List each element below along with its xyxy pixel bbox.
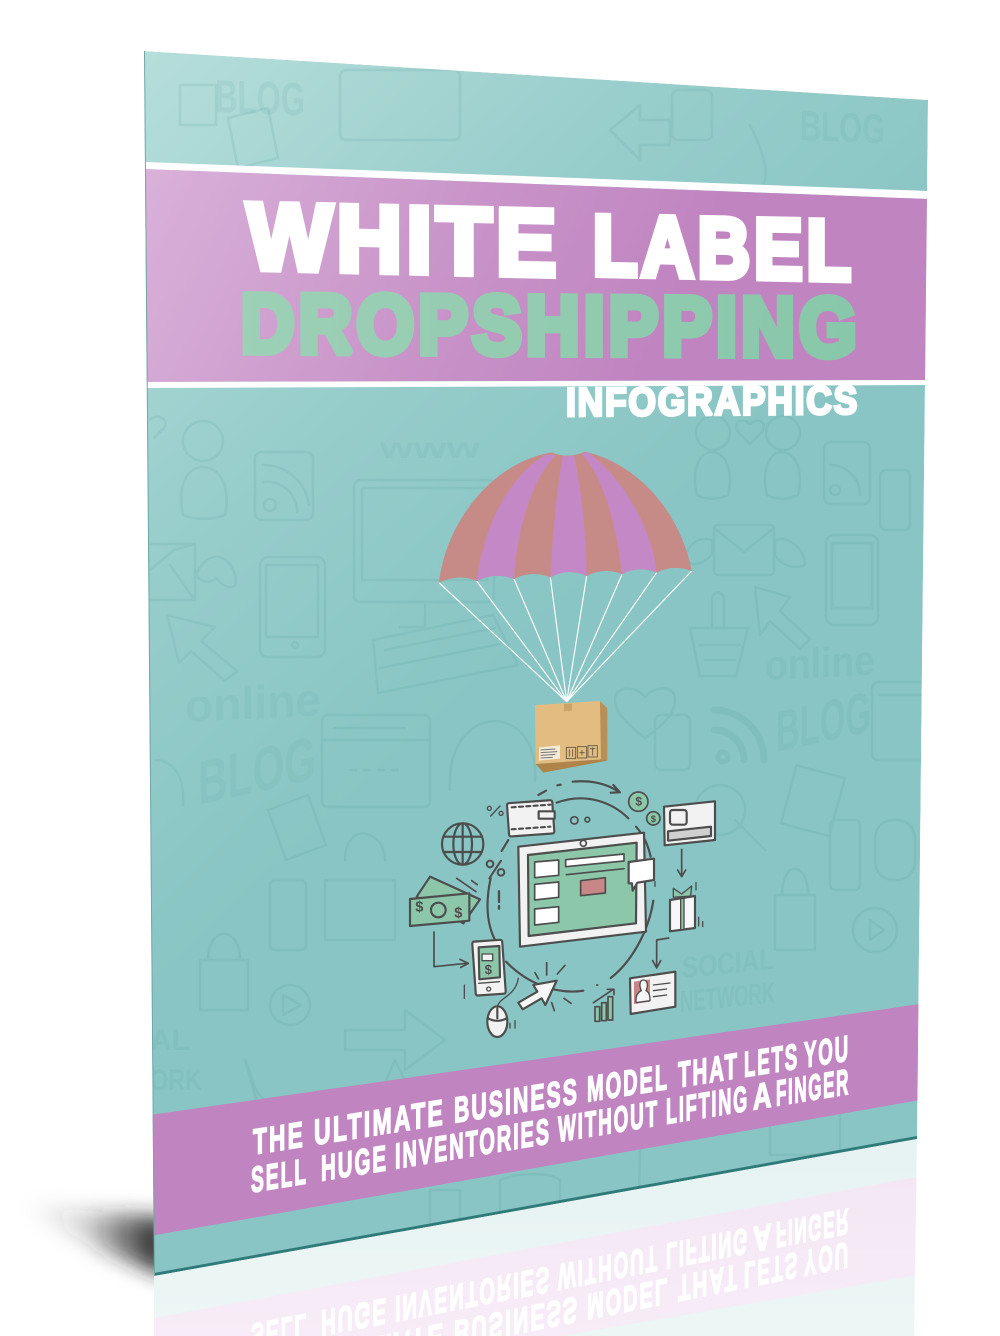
icon: tablet — [518, 833, 654, 947]
dollar signs: $ — [454, 905, 462, 921]
faint doodle words: AL — [150, 1024, 190, 1057]
faint doodle words: NETWORK — [680, 977, 775, 1019]
dollar signs: $ — [635, 795, 642, 809]
faint doodle words: online — [185, 673, 321, 732]
tagline text: MODEL — [587, 1056, 669, 1110]
icon: exclamation mark — [495, 891, 502, 909]
tagline text: INVENTORIES — [395, 1110, 551, 1177]
heading: DROPSHIPPING: DROPSHIPPING — [241, 277, 861, 374]
heading: WHITE LABEL: LABEL — [593, 199, 855, 299]
reflection of the cover: MODEL — [587, 1270, 669, 1327]
parachute cords — [439, 571, 692, 702]
text: FINGER — [776, 1061, 850, 1114]
page thin left edge — [144, 51, 155, 1276]
arrow: gift to id card — [653, 938, 669, 968]
page background — [144, 51, 928, 1276]
dollar signs: $ — [415, 899, 423, 915]
icon: credit card — [664, 801, 715, 845]
icon: globe — [442, 823, 483, 865]
faint doodle words: BLOG — [776, 681, 871, 765]
decorative circles — [571, 817, 590, 824]
icon: cursor arrow — [518, 963, 571, 1011]
icon: bar chart with arrow — [593, 985, 614, 1021]
parachute purple gores — [477, 452, 657, 581]
tagline text: ULTIMATE — [314, 1091, 445, 1153]
faint doodle words: ORK — [150, 1064, 202, 1097]
tagline text: A — [753, 1073, 774, 1118]
page bottom edge — [154, 1136, 917, 1276]
faint doodle words: online — [765, 637, 875, 689]
tagline text: THE — [253, 1114, 305, 1162]
arrow: card to gift — [678, 849, 686, 877]
faint doodle words: BLOG — [215, 70, 305, 126]
icon: computer mouse — [487, 978, 518, 1037]
reflection of the cover: LIFTING — [666, 1220, 749, 1277]
faint doodle words: www — [379, 432, 481, 465]
arrow: money to phone — [434, 932, 468, 967]
icon: gift box — [670, 883, 703, 931]
faint doodle words: BLOG — [198, 723, 316, 819]
tagline text: YOU — [804, 1027, 850, 1075]
icon: banknotes — [410, 877, 480, 926]
drop shadow — [20, 1205, 170, 1278]
icon: smartphone — [464, 940, 506, 998]
speech bubble — [629, 859, 654, 891]
icon: coins — [629, 792, 660, 825]
tagline text: HUGE — [321, 1137, 388, 1189]
faint doodle words: BLOG — [800, 102, 885, 152]
reflection of the cover: LETS — [744, 1244, 799, 1296]
heading: WHITE LABEL: WHITE — [247, 184, 561, 296]
icon: cardboard box — [535, 701, 607, 773]
package box and business cycle illustration — [410, 701, 715, 1037]
icon: id card — [630, 972, 675, 1014]
title band — [144, 162, 928, 388]
dollar signs: $ — [651, 814, 657, 824]
tagline text — [251, 1027, 850, 1200]
heading: WHITE LABEL — [247, 184, 855, 299]
dollar signs: $ — [485, 962, 493, 977]
dollar signs — [415, 795, 657, 977]
tagline text: LIFTING — [666, 1078, 749, 1132]
reflection of the cover: INVENTORIES — [395, 1258, 551, 1329]
reflection of the cover: WITHOUT — [558, 1238, 659, 1298]
tagline text: BUSINESS — [454, 1070, 579, 1131]
parachute canopy — [439, 452, 692, 583]
cycle ring arcs — [488, 781, 653, 992]
tagline text: THAT — [678, 1045, 739, 1095]
cover page — [144, 51, 928, 1276]
tagline text: WITHOUT — [558, 1092, 659, 1150]
tagline text: SELL — [251, 1150, 308, 1200]
faint doodle words: SOCIAL — [682, 943, 774, 985]
icon: wallet — [507, 800, 555, 837]
reflection of the cover: YOU — [804, 1234, 850, 1284]
reflection of the cover — [154, 1139, 917, 1336]
parachute — [439, 452, 692, 702]
tablet screen content — [535, 854, 624, 925]
reflection of the cover: A — [753, 1215, 774, 1260]
faint doodle words — [217, 80, 396, 458]
faint doodle background pattern — [150, 70, 927, 1240]
bottom tagline band — [150, 1004, 920, 1236]
reflection of the cover: THAT — [678, 1256, 739, 1309]
tagline text: LETS — [744, 1035, 799, 1085]
reflection of the cover: FINGER — [776, 1200, 850, 1255]
heading: INFOGRAPHICS: INFOGRAPHICS — [566, 379, 859, 425]
icon: percent signs — [487, 806, 503, 816]
